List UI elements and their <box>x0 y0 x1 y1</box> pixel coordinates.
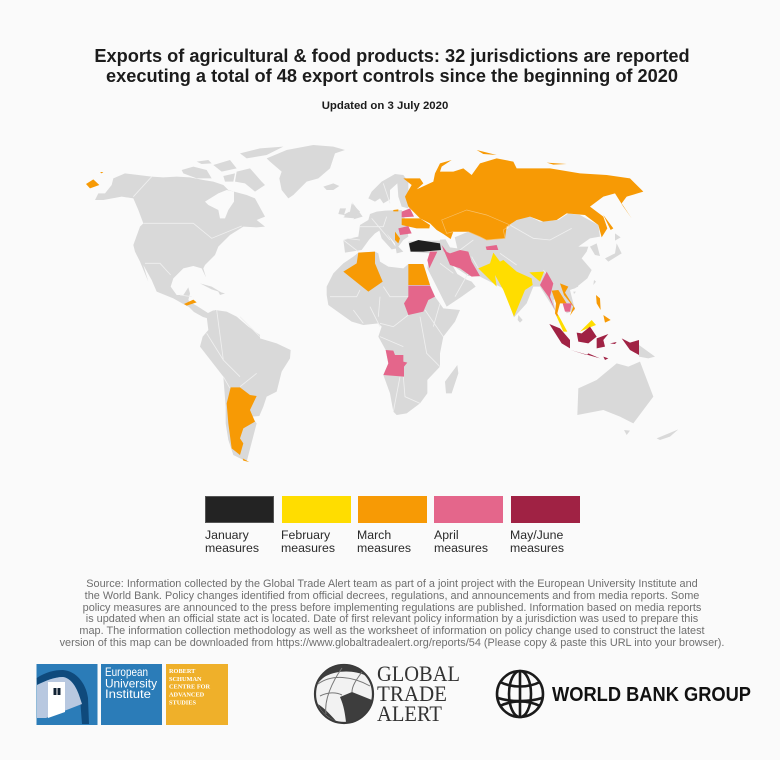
logo: European University Institute: STUDIES <box>169 700 196 706</box>
Central American isthmus <box>188 302 214 319</box>
logo: European University Institute: ADVANCED <box>169 692 205 698</box>
May/June measures country: Indonesia <box>549 324 639 360</box>
March measures countries: orange <box>343 150 643 328</box>
April measures countries: pink <box>383 208 572 377</box>
label: May/June: measures <box>510 541 564 555</box>
swatch: May/June <box>511 496 580 523</box>
label: May/June: May/June <box>510 528 563 542</box>
world map <box>86 145 678 462</box>
title <box>94 46 690 86</box>
source text: map. The information collection methodology as well as the worksheet of information on policy change used to construct the latest <box>79 625 705 637</box>
January measures country: Turkey <box>409 240 441 252</box>
label: January: measures <box>205 541 259 555</box>
Kazakhstan border <box>442 210 510 240</box>
label: April: measures <box>434 541 488 555</box>
source text: is updated when an official state act is located. Date of first relevant policy information by a jurisdiction was used to prepare this <box>86 613 698 625</box>
legend <box>205 496 580 555</box>
logo: European University Institute: University <box>105 676 157 690</box>
logo: Global Trade Alert: ALERT <box>377 701 443 726</box>
swatch: January <box>205 496 274 523</box>
Black Sea and Caspian Sea <box>408 229 457 248</box>
label: April <box>434 528 488 555</box>
logo: European University Institute: Institute <box>105 687 151 701</box>
source text: Source: Information collected by the Global Trade Alert team as part of a joint project with the European University Institute and <box>86 578 698 590</box>
swatch: April <box>434 496 503 523</box>
label: February: February <box>281 528 330 542</box>
logo: European University Institute: SCHUMAN <box>169 676 202 683</box>
label: March <box>357 528 411 555</box>
logo: World Bank Group <box>496 670 751 718</box>
label: February <box>281 528 335 555</box>
swatch: March <box>358 496 427 523</box>
label: January: January <box>205 528 249 542</box>
logo: Global Trade Alert: TRADE <box>377 681 447 706</box>
label: May/June <box>510 528 564 555</box>
update date: Updated on 3 July 2020 <box>322 100 448 112</box>
logo: Global Trade Alert <box>314 662 460 726</box>
borders on grey land <box>330 183 478 412</box>
label: February: measures <box>281 541 335 555</box>
source text <box>60 578 724 649</box>
North America and North Atlantic islands <box>88 145 363 311</box>
label: March: measures <box>357 541 411 555</box>
Africa, Madagascar, Europe, Asia and Oceania <box>327 174 678 440</box>
Hudson Bay <box>205 190 234 218</box>
title: executing a total of 48 export controls since the beginning of 2020 <box>106 66 678 86</box>
swatch: February <box>282 496 351 523</box>
label: March: March <box>357 528 391 542</box>
logo: European University Institute: European <box>105 665 148 679</box>
title: Exports of agricultural & food products: 32 jurisdictions are reported <box>94 46 690 66</box>
logo: European University Institute: ROBERT <box>169 668 196 675</box>
South America <box>200 310 291 462</box>
label: April: April <box>434 528 459 542</box>
source text: policy measures are announced to the press before implementing regulations are published. Information based on media reports <box>83 602 701 614</box>
logo: European University Institute <box>36 664 228 725</box>
East Asia <box>500 213 622 294</box>
source text: the World Bank. Policy changes identified from official decrees, regulations, and announcements and from media reports. Some <box>85 590 699 602</box>
label: January <box>205 528 259 555</box>
source text: version of this map can be downloaded from https://www.globaltradealert.org/reports/54 (Please copy & paste this URL into your browser). <box>60 637 724 649</box>
logo: European University Institute: CENTRE FOR <box>169 684 211 690</box>
February measures countries: yellow <box>478 253 596 332</box>
